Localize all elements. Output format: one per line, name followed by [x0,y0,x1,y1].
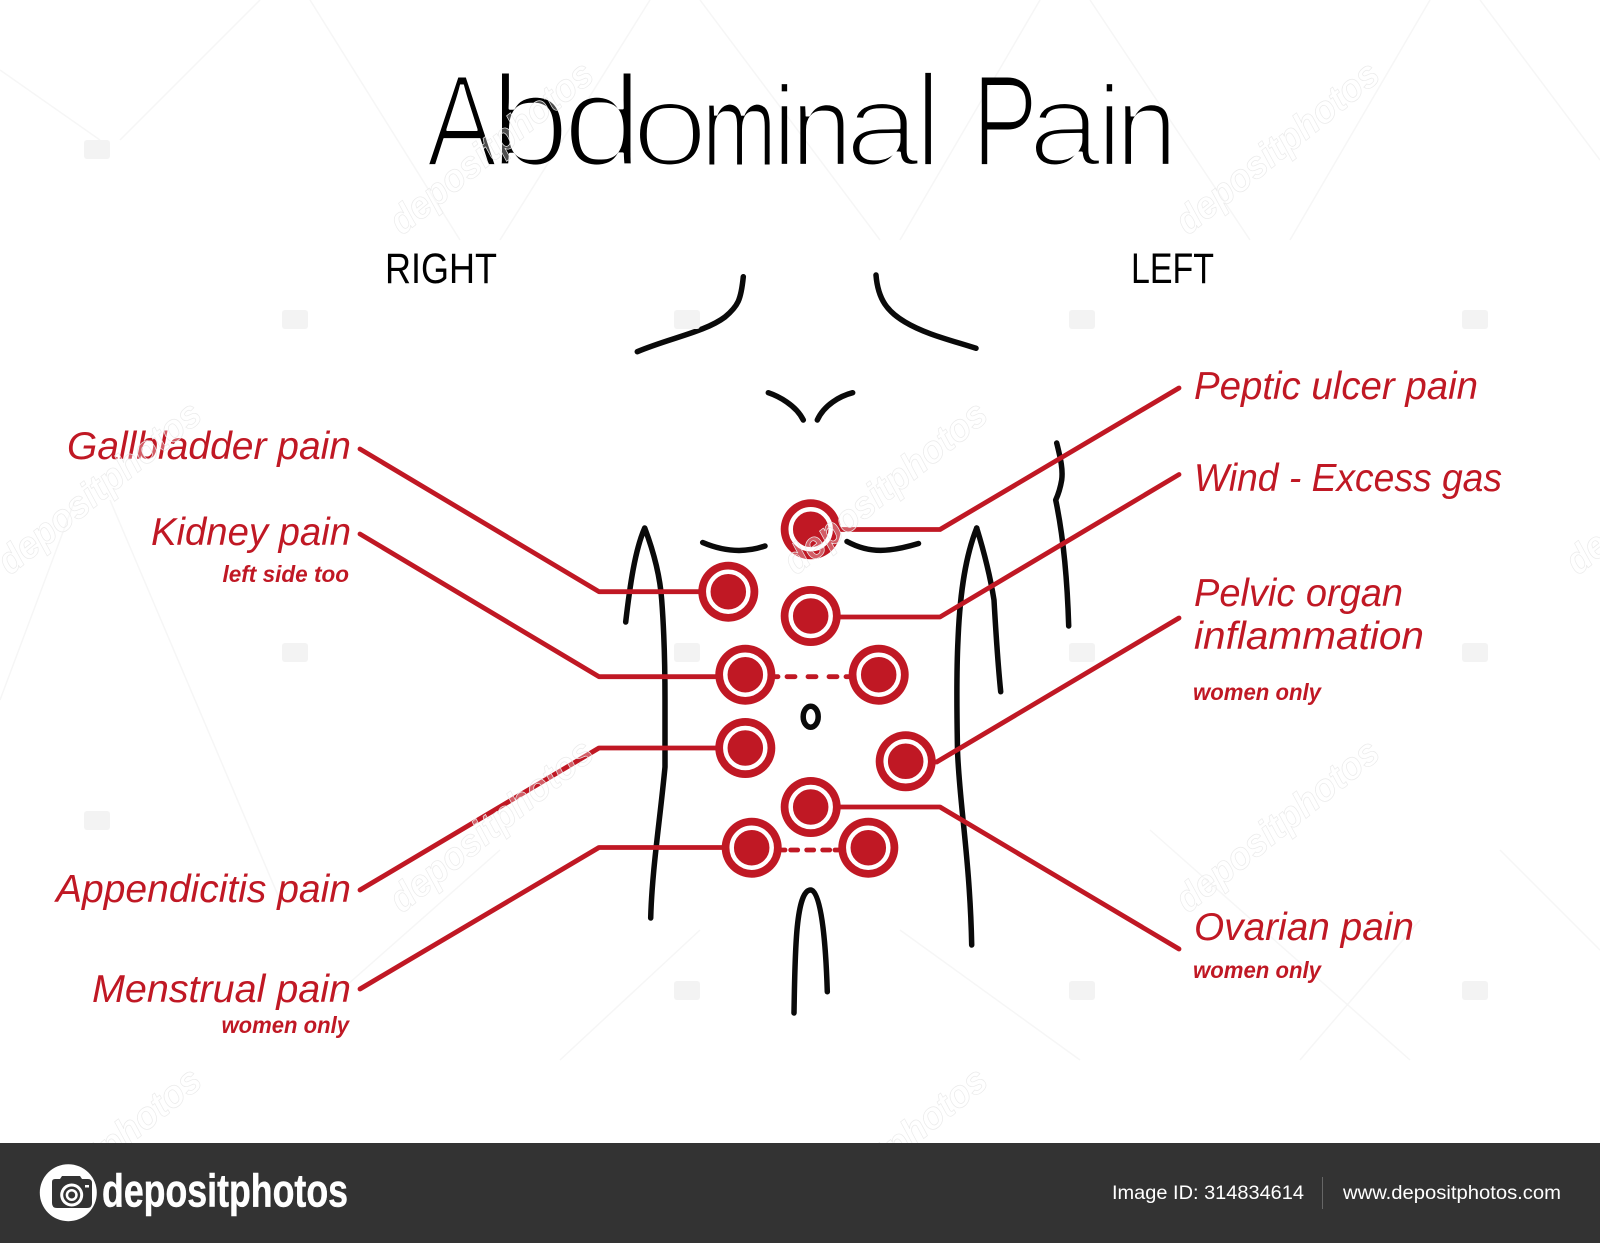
marker: appendicitis [715,718,775,778]
marker: peptic ulcer [781,499,841,559]
marker: menstrual right [722,818,782,878]
leader line: menstrual [360,848,725,989]
title: a [1027,59,1103,190]
marker: gallbladder [698,562,758,622]
leader line: gallbladder [360,449,705,592]
label: LEFT side: LEFT [1131,245,1214,293]
marker: pelvic [876,731,936,791]
leader line: wind [835,474,1179,617]
marker: kidney left [849,645,909,705]
leader line: pelvic [930,618,1179,762]
text: women only (menstrual): women only [222,1012,350,1038]
text: women only (pelvic): women only [1193,679,1322,705]
dashed link: kidney [775,674,850,679]
title: a [844,59,921,190]
navel [803,706,818,727]
watermark: depositphotos [381,53,602,243]
text: Gallbladder pain: Gallbladder pain [67,425,351,468]
text: Appendicitis pain: Appendicitis pain [54,868,351,911]
marker: kidney right [715,645,775,705]
leader line: kidney [360,534,720,677]
title: n [790,63,853,189]
leader line: appendicitis [360,748,720,890]
chest curve right [847,542,918,550]
sternum notch [768,393,853,420]
pain markers [698,499,936,878]
body outline [626,275,1069,1013]
footer bar [0,1143,1600,1243]
marker: ovarian [781,777,841,837]
torso right side [957,528,977,945]
title: o [631,59,709,190]
text: Kidney pain: Kidney pain [151,511,351,554]
far right arm line [1056,443,1069,626]
text: Ovarian pain: Ovarian pain [1194,906,1414,949]
marker: menstrual left [838,818,898,878]
watermark: depositphotos [775,393,996,583]
title: l [916,49,940,193]
leader line: peptic ulcer [835,388,1179,530]
title: n [1116,63,1178,189]
groin line [794,890,827,1013]
neck and collar right [876,275,976,348]
chest curve left [703,542,765,551]
title: b [489,49,570,193]
leader line: ovarian [835,807,1179,949]
image id: Image ID: 314834614 [1112,1182,1304,1204]
title: i [772,63,797,189]
title: A [427,49,497,193]
text: Peptic ulcer pain: Peptic ulcer pain [1194,365,1478,408]
title: d [562,49,643,193]
neck and collar left [637,277,743,352]
text: women only (ovarian): women only [1193,957,1322,983]
text: Pelvic organ inflammation [1194,572,1424,658]
logo text: depositphotos [102,1164,348,1216]
website: www.depositphotos.com [1342,1182,1561,1204]
watermark: depositphotos [1167,53,1388,243]
text: Wind - Excess gas: Wind - Excess gas [1194,457,1502,500]
title: m [702,63,777,189]
text: Menstrual pain: Menstrual pain [92,968,351,1011]
label: RIGHT side: RIGHT [385,245,497,293]
text: Pelvic organ inflammation: Pelvic organ [1194,572,1403,615]
icon: depositphotos camera logo [40,1164,97,1221]
watermark: depositphotos [1167,731,1388,921]
torso left side [626,528,665,918]
marker: wind [781,586,841,646]
watermark: depositphotos [381,731,602,921]
arm inner line [977,528,1001,692]
text: left side too: left side too [222,561,349,587]
text: Pelvic organ inflammation: inflammation [1194,615,1424,658]
title: P [972,49,1038,193]
title: i [1097,63,1122,189]
dashed link: menstrual [782,848,838,852]
